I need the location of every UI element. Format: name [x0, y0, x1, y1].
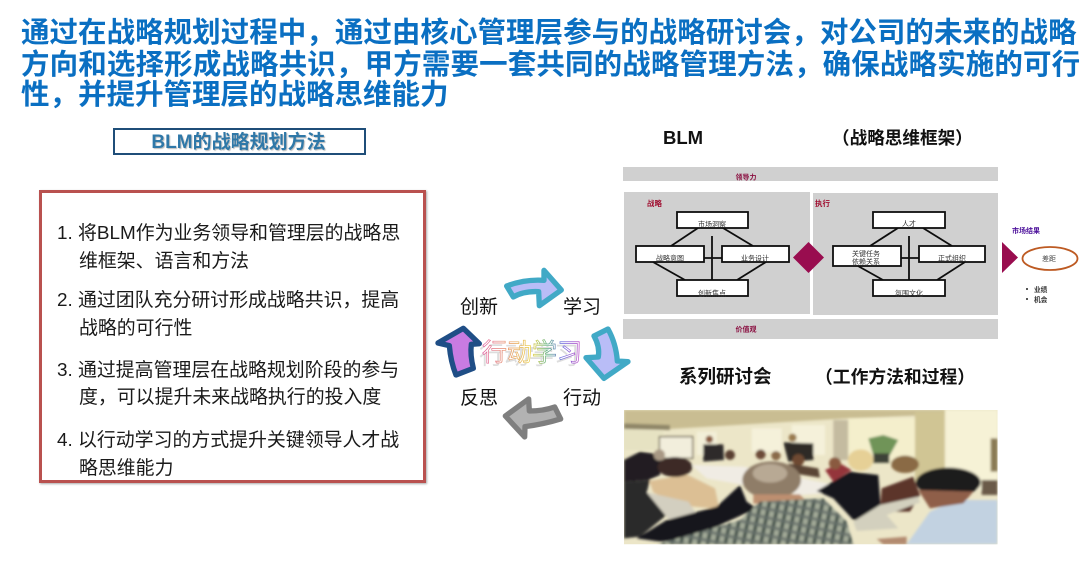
woman in beige: [649, 474, 719, 509]
photo: workshop meeting: [624, 410, 998, 544]
heading: workshop series: 系列研讨会: [679, 366, 772, 387]
bar: leadership: [623, 167, 998, 182]
far table people: [756, 449, 766, 459]
label: action: 行动: [563, 387, 601, 409]
box: talent: 人才: [902, 219, 916, 228]
bar: values: 价值观: [736, 324, 756, 334]
arrow: reflection to innovation: [438, 328, 479, 375]
bar: values: [623, 319, 998, 339]
box: strategic intent: [636, 246, 704, 262]
table: [692, 465, 840, 495]
list text: 4. 以行动学习的方式提升关键领导人才战: [57, 430, 399, 451]
market results: [1012, 226, 1078, 304]
list text: 略思维能力: [79, 458, 173, 479]
wordart: action learning: 行动学习: [479, 342, 579, 370]
brown-haired person: [880, 477, 920, 512]
blonde woman: [817, 472, 882, 520]
icon: diamond connector: [793, 242, 824, 273]
box: market insight: [677, 212, 748, 228]
market results: 差距: [1042, 254, 1056, 263]
panel: numbered list: [39, 190, 426, 483]
box: business design: 业务设计: [741, 254, 769, 262]
box: key tasks and dependencies: [833, 246, 901, 266]
heading: BLM framework: BLM: [663, 127, 703, 148]
box: innovation focus: [677, 280, 748, 298]
icon: triangle arrow: [1002, 242, 1018, 273]
man in blue shirt: [907, 500, 998, 544]
title: 方向和选择形成战略共识，甲方需要一套共同的战略管理方法，确保战略实施的可行: [21, 49, 1080, 81]
heading: BLM strategic planning method: BLM的战略规划方法: [151, 132, 326, 153]
box: talent: [873, 212, 945, 228]
ceiling and back wall: [624, 410, 998, 429]
box: key tasks and dependencies: 关键任务: [852, 249, 880, 258]
arrow: action to reflection: [505, 399, 561, 437]
box: formal organization: [919, 246, 985, 262]
title: 通过在战略规划过程中，通过由核心管理层参与的战略研讨会，对公司的未来的战略: [21, 17, 1077, 49]
box: business design: [722, 246, 789, 262]
bar: leadership: 领导力: [736, 172, 756, 182]
heading: BLM framework: [663, 127, 973, 148]
market results: 市场结果: [1012, 226, 1040, 235]
heading: BLM strategic planning method: [113, 128, 366, 155]
box: formal organization: 正式组织: [938, 254, 966, 262]
box: market insight: 市场洞察: [698, 220, 726, 228]
box: innovation focus: 创新焦点: [698, 288, 726, 298]
arrow: innovation to learning: [507, 270, 561, 306]
box: climate and culture: 氛围文化: [895, 288, 923, 298]
market results: 机会: [1034, 295, 1048, 304]
wordart: action learning: 行动学习: [482, 339, 582, 367]
list text: 3. 通过提高管理层在战略规划阶段的参与: [57, 360, 399, 381]
standing people: [703, 444, 724, 462]
list text: [57, 222, 400, 479]
panel: strategy: [624, 192, 810, 314]
left group: [624, 452, 663, 482]
label: learning: 学习: [563, 296, 601, 318]
diagram: action learning cycle: [438, 270, 628, 437]
box: strategic intent: 战略意图: [656, 254, 684, 262]
box: climate and culture: [873, 280, 945, 298]
list text: 维框架、语言和方法: [79, 251, 249, 272]
box: key tasks and dependencies: 依赖关系: [852, 257, 880, 266]
bald man in plaid: [742, 461, 801, 499]
title: [21, 17, 1080, 111]
list text: 度，可以提升未来战略执行的投入度: [79, 387, 381, 408]
heading: workshop series: [679, 366, 975, 387]
chart: BLM strategic thinking framework: [623, 167, 1078, 339]
folding chair: [853, 497, 920, 531]
panel: strategy: 战略: [647, 198, 662, 208]
list text: 战略的可行性: [79, 318, 192, 339]
heading: BLM framework: （战略思维框架）: [832, 128, 973, 148]
arrow: learning to action: [586, 329, 628, 378]
list text: 2. 通过团队充分研讨形成战略共识，提高: [57, 290, 399, 311]
panel: execution: 执行: [815, 198, 830, 208]
heading: workshop series: （工作方法和过程）: [815, 367, 975, 387]
label: innovation: 创新: [460, 296, 498, 318]
list text: 1. 将BLM作为业务领导和管理层的战略思: [57, 223, 400, 244]
label: reflection: 反思: [460, 387, 498, 409]
market results: 业绩: [1034, 285, 1048, 294]
title: 性，并提升管理层的战略思维能力: [21, 79, 449, 111]
panel: execution: [813, 193, 998, 315]
